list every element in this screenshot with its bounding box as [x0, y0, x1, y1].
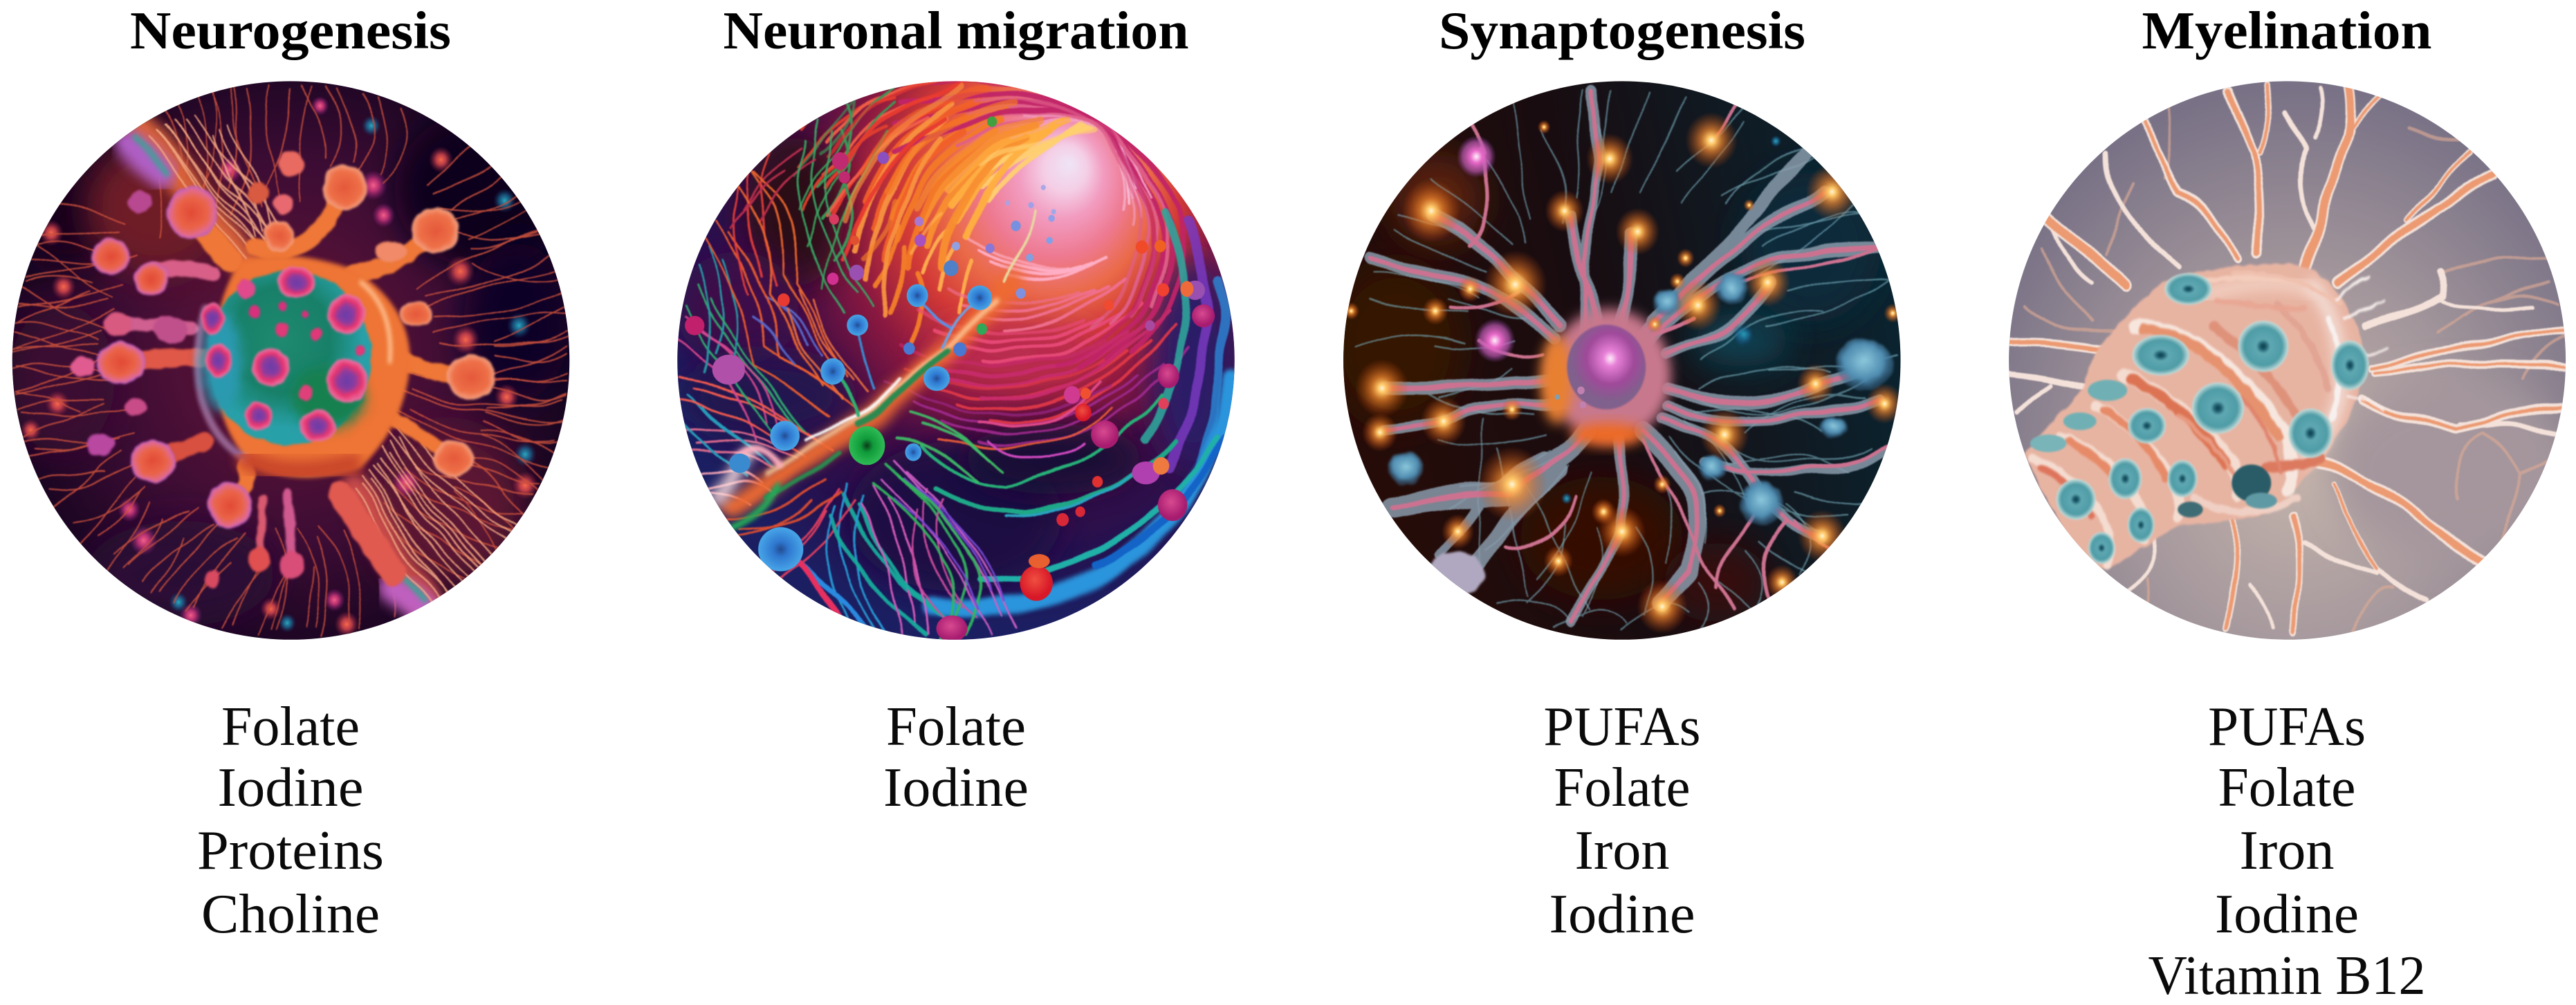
nutrient list: Myelination: Vitamin B12 — [2149, 946, 2425, 1005]
nutrient list: Synaptogenesis: Iodine — [1549, 884, 1695, 945]
teal myelin nodules — [2030, 273, 2369, 564]
soma and myelinated body — [2025, 264, 2387, 568]
thin blue fibres — [1309, 17, 1944, 691]
orange halo behind soma — [213, 255, 410, 478]
nutrient list: Neurogenesis — [197, 697, 384, 945]
heading: Myelination: Myelination — [2142, 1, 2432, 60]
nutrient list: Neuronal migration — [883, 697, 1029, 818]
left tangled fibres — [668, 124, 1019, 646]
panel: synaptogenesis — [1309, 1, 1944, 691]
main branches orange core — [2011, 84, 2565, 635]
faint background branches — [2025, 110, 2565, 631]
heading: Neuronal migration: Neuronal migration — [724, 1, 1188, 60]
nutrient list: Myelination: Iodine — [2215, 884, 2359, 945]
image: neurons migrating through a vortex of fibres — [643, 22, 1259, 653]
glowing synaptic nodes — [1343, 112, 1904, 634]
nutrient list: Myelination — [2149, 697, 2425, 1005]
orange central star and arms — [119, 194, 455, 573]
nutrient list: Neurogenesis: Choline — [201, 884, 380, 945]
nutrient list: Synaptogenesis: PUFAs — [1544, 697, 1700, 757]
bokeh dots — [20, 96, 538, 638]
bright diagonal migration path — [717, 212, 1037, 529]
nutrient list: Synaptogenesis: Folate — [1554, 757, 1691, 818]
migrating neurons — [685, 116, 1215, 642]
heading: Neurogenesis: Neurogenesis — [130, 1, 451, 60]
central soma — [1555, 324, 1646, 409]
image: myelinated neuron on grey background — [1989, 66, 2576, 653]
axon band — [127, 128, 435, 618]
nutrient list: Myelination: Iron — [2240, 820, 2334, 881]
bulbous progenitor cells — [70, 151, 495, 589]
nutrient list: Neuronal migration: Iodine — [883, 757, 1029, 818]
blue synaptic cells — [1388, 273, 1893, 596]
lower-right teal and blue bands — [922, 212, 1234, 610]
image: neuron forming synapses with glowing junctions — [1309, 17, 1944, 691]
concentric vortex rings — [746, 22, 1211, 475]
nutrient list: Synaptogenesis — [1544, 697, 1700, 945]
nutrient list: Myelination: PUFAs — [2208, 697, 2366, 757]
nutrient list: Myelination: Folate — [2218, 757, 2356, 818]
panel: neurogenesis — [12, 11, 570, 640]
central junction glow — [1548, 308, 1671, 441]
nutrient list: Synaptogenesis: Iron — [1574, 820, 1670, 881]
bright fibre bundle — [149, 119, 526, 614]
main branches white edge — [2011, 84, 2565, 635]
nutrient list: Neurogenesis: Proteins — [197, 820, 384, 881]
central cell body with surface bumps — [201, 266, 371, 445]
pink dendrite cores — [1368, 89, 1888, 622]
fine radiating fibres — [12, 84, 569, 638]
nutrient list: Neurogenesis: Iodine — [217, 757, 364, 818]
image: neural stem cell with radiating processes — [12, 81, 570, 640]
panel: neuronal migration — [677, 11, 1235, 640]
myelin wraps — [2032, 273, 2387, 564]
heading: Synaptogenesis: Synaptogenesis — [1439, 1, 1805, 60]
panel: myelination — [1989, 1, 2576, 653]
nutrient list: Neurogenesis: Folate — [221, 697, 360, 757]
nutrient list: Neuronal migration: Folate — [886, 697, 1026, 757]
grey-blue dendrite sheaths — [1368, 89, 1888, 622]
